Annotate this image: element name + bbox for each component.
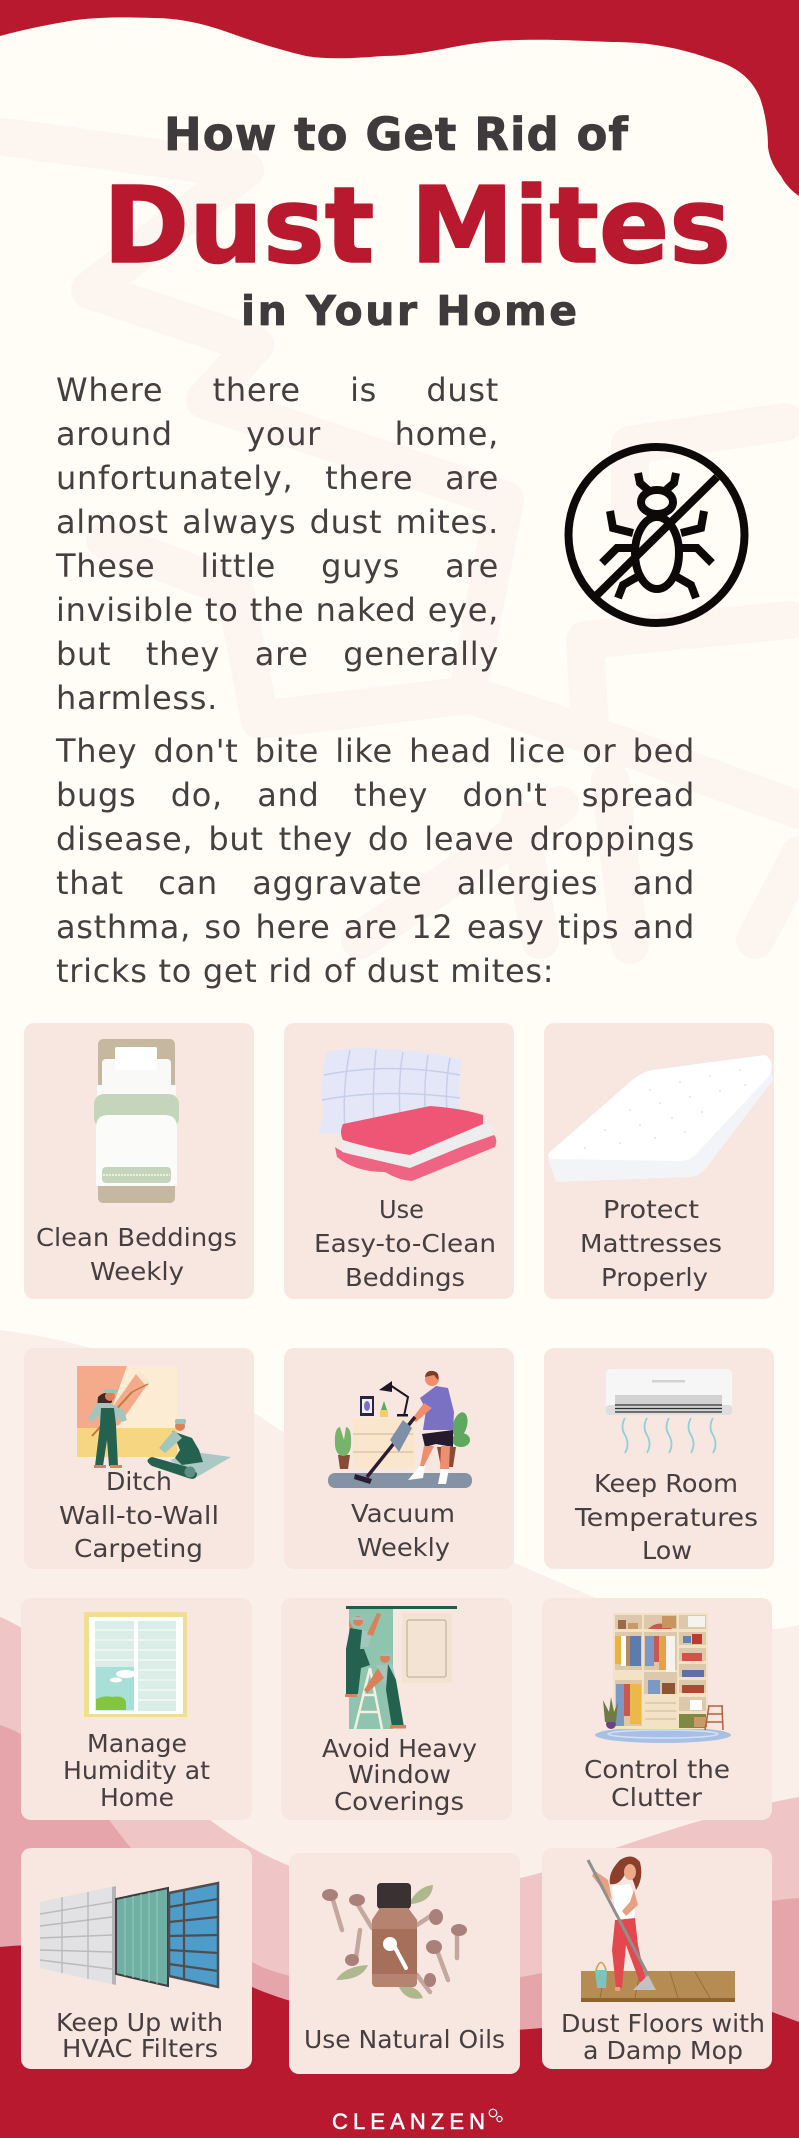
title [103, 108, 731, 335]
label [63, 1729, 210, 1812]
card: Manage Humidity at Home [21, 1598, 252, 1820]
card: Clean Beddings Weekly [24, 1023, 254, 1299]
label [314, 1195, 496, 1292]
icon: person vacuuming [328, 1371, 472, 1488]
card: Avoid Heavy Window Coverings [281, 1598, 512, 1820]
intro paragraph two: They don't bite like head lice or bed [56, 732, 695, 770]
label [584, 1755, 730, 1812]
label: Humidity at [63, 1756, 210, 1785]
label: Use [379, 1195, 424, 1224]
intro paragraph one: These little guys are [56, 547, 499, 585]
icon: pillow and blankets [318, 1048, 496, 1181]
icon: bed [94, 1039, 179, 1203]
intro paragraph two: asthma, so here are 12 easy tips and [56, 908, 695, 946]
label [351, 1499, 455, 1562]
card: Use Natural Oils [289, 1853, 520, 2074]
label: Vacuum [351, 1499, 455, 1528]
intro paragraph two: tricks to get rid of dust mites: [56, 952, 554, 990]
card: Protect Mattresses Properly [544, 1023, 774, 1299]
logo: CLEANZEN: CLEANZEN [332, 2109, 485, 2134]
icon: workers hanging curtains [345, 1606, 457, 1729]
title: Dust Mites [103, 165, 731, 287]
card: Ditch Wall-to-Wall Carpeting [24, 1348, 254, 1569]
label: Control the [584, 1755, 730, 1784]
label: Dust Floors with [561, 2009, 765, 2038]
intro paragraph two: disease, but they do leave droppings [56, 820, 695, 858]
icon: woman mopping [581, 1856, 735, 2002]
card: Control the Clutter [542, 1598, 772, 1820]
icon: window [84, 1612, 187, 1717]
label: Clutter [611, 1783, 703, 1812]
label [574, 1469, 758, 1565]
label [36, 1223, 237, 1286]
icon: HVAC filters [40, 1883, 218, 1987]
label [561, 2009, 765, 2065]
label: Use Natural Oils [304, 2025, 505, 2054]
card: Use Easy-to-Clean Beddings [284, 1023, 514, 1299]
card: Dust Floors with a Damp Mop [542, 1848, 772, 2069]
icon: no bugs [564, 443, 748, 627]
intro paragraph one: almost always dust mites. [56, 503, 499, 541]
label [322, 1734, 477, 1816]
label: Keep Room [594, 1469, 738, 1498]
label: Protect [603, 1195, 699, 1224]
label: Wall-to-Wall [59, 1501, 219, 1530]
label: Easy-to-Clean [314, 1229, 496, 1258]
label: Carpeting [74, 1534, 203, 1563]
title: in Your Home [241, 287, 577, 335]
label [580, 1195, 722, 1292]
label: Low [642, 1536, 692, 1565]
label: Keep Up with [56, 2008, 223, 2037]
label [59, 1467, 219, 1563]
label: Coverings [334, 1787, 464, 1816]
title: How to Get Rid of [164, 108, 628, 161]
label: Beddings [345, 1263, 465, 1292]
intro paragraph one: harmless. [56, 679, 218, 717]
card: Keep Up with HVAC Filters [21, 1848, 252, 2069]
icon: air conditioner [606, 1369, 732, 1453]
label: Clean Beddings [36, 1223, 237, 1252]
label: Properly [601, 1263, 708, 1292]
intro paragraph two [56, 732, 695, 990]
label: Home [100, 1783, 174, 1812]
label: Ditch [106, 1467, 172, 1496]
icon: mattress [548, 1055, 773, 1182]
intro paragraph one: around your home, [56, 415, 499, 453]
intro paragraph two: that can aggravate allergies and [56, 864, 695, 902]
intro paragraph one: unfortunately, there are [56, 459, 499, 497]
intro paragraph one: Where there is dust [56, 371, 499, 409]
label: Mattresses [580, 1229, 722, 1258]
label: a Damp Mop [583, 2036, 743, 2065]
icon: oil bottle and cloves [322, 1883, 467, 1999]
intro paragraph two: bugs do, and they don't spread [56, 776, 695, 814]
label: Weekly [90, 1257, 184, 1286]
label: Avoid Heavy [322, 1734, 477, 1763]
icon: organized closet [595, 1613, 731, 1743]
intro paragraph one: invisible to the naked eye, [56, 591, 499, 629]
label: Temperatures [574, 1503, 758, 1532]
intro paragraph one: but they are generally [56, 635, 499, 673]
label: Weekly [357, 1533, 450, 1562]
label [56, 2008, 223, 2063]
card: Keep Room Temperatures Low [544, 1348, 774, 1569]
label: Window [348, 1760, 451, 1789]
card: Vacuum Weekly [284, 1348, 514, 1569]
label: HVAC Filters [62, 2034, 218, 2063]
icon: workers painting and rolling carpet [77, 1366, 231, 1479]
label: Manage [87, 1729, 187, 1758]
intro paragraph one [56, 371, 499, 717]
